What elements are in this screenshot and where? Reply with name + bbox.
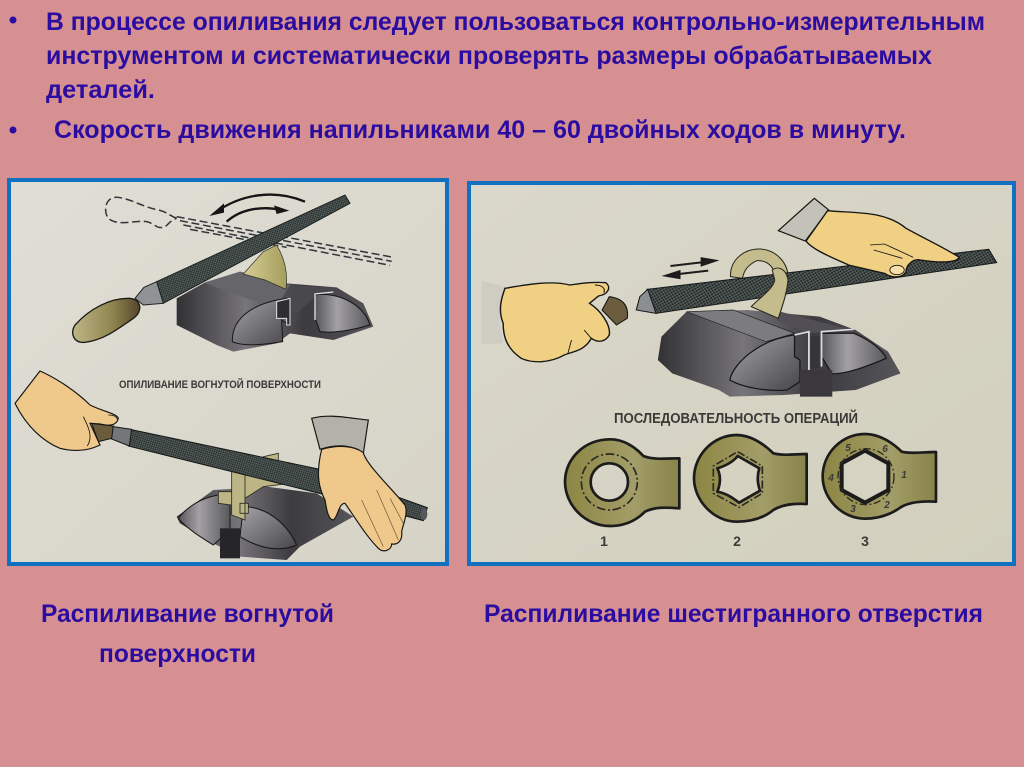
bullet 1 marker xyxy=(10,16,16,24)
washer step numbers: 1 xyxy=(600,533,608,549)
icon: lower workpiece xyxy=(218,453,317,520)
washers row xyxy=(565,434,936,526)
icon: left hand on handle xyxy=(15,371,118,451)
icon: double arrows xyxy=(666,258,715,278)
icon: right hand xyxy=(806,211,959,277)
panel frame xyxy=(469,183,1014,564)
washer step numbers: 4 xyxy=(827,473,834,484)
icon: curved workpiece xyxy=(243,245,287,289)
label: sequence of operations: ПОСЛЕДОВАТЕЛЬНОСТЬ ОПЕРАЦИЙ xyxy=(614,409,858,427)
icon: round file xyxy=(92,423,427,521)
icon: ring workpiece, front arm xyxy=(751,268,788,318)
icon: lower vise xyxy=(177,487,353,560)
bullet 2 text: Скорость движения напильниками 40 – 60 двойных ходов в минуту. xyxy=(54,116,906,144)
bullet list: filing rules xyxy=(10,8,985,144)
caption: concave surface xyxy=(41,600,334,668)
icon: dashed ghost file xyxy=(106,197,393,265)
icon: file with hands xyxy=(602,249,997,325)
icon: flat file with handle xyxy=(73,195,350,342)
panel: hexagonal hole filing xyxy=(469,183,1014,564)
bullet 1 text: деталей. xyxy=(46,76,155,104)
panel frame xyxy=(9,180,447,564)
caption: concave surface: Распиливание вогнутой xyxy=(41,600,334,628)
icon: grey cuff xyxy=(312,416,368,453)
icon: top vise xyxy=(177,272,373,352)
icon: washer 3, finished hexagon xyxy=(823,434,936,519)
illustrations, right panel xyxy=(482,198,997,397)
washer step numbers: 5 xyxy=(845,443,851,454)
washer step numbers: 1 xyxy=(901,470,907,481)
washer step numbers: 6 xyxy=(882,444,888,455)
icon: left hand xyxy=(500,282,609,362)
icon: right hand on file xyxy=(318,446,406,551)
icon: left cuff xyxy=(482,281,507,344)
washer step numbers: 3 xyxy=(861,533,869,549)
label: concave filing: ОПИЛИВАНИЕ ВОГНУТОЙ ПОВЕРХНОСТИ xyxy=(119,378,321,391)
bullet 1 text: В процессе опиливания следует пользоваться контрольно-измерительным xyxy=(46,8,985,36)
illustrations, left panel xyxy=(15,195,427,560)
panel: concave surface filing xyxy=(9,180,447,564)
washer step numbers: 2 xyxy=(883,500,890,511)
icon: washer 2, rough hexagon xyxy=(694,435,807,522)
icon: vise xyxy=(658,310,901,397)
washer step numbers: 2 xyxy=(733,533,741,549)
caption: concave surface: поверхности xyxy=(99,640,256,668)
bullet 2 marker xyxy=(10,126,16,134)
bullet 1 text: инструментом и систематически проверять размеры обрабатываемых xyxy=(46,42,932,70)
icon: ring workpiece, back xyxy=(730,249,788,318)
icon: right cuff xyxy=(778,198,829,241)
icon: curved motion arrows xyxy=(217,195,305,222)
bullet 1 text xyxy=(46,8,985,104)
caption: hexagonal hole: Распиливание шестигранного отверстия xyxy=(484,600,983,628)
washer step numbers xyxy=(600,443,907,549)
icon: washer 1, round hole xyxy=(565,439,679,526)
washer step numbers: 3 xyxy=(850,504,856,515)
